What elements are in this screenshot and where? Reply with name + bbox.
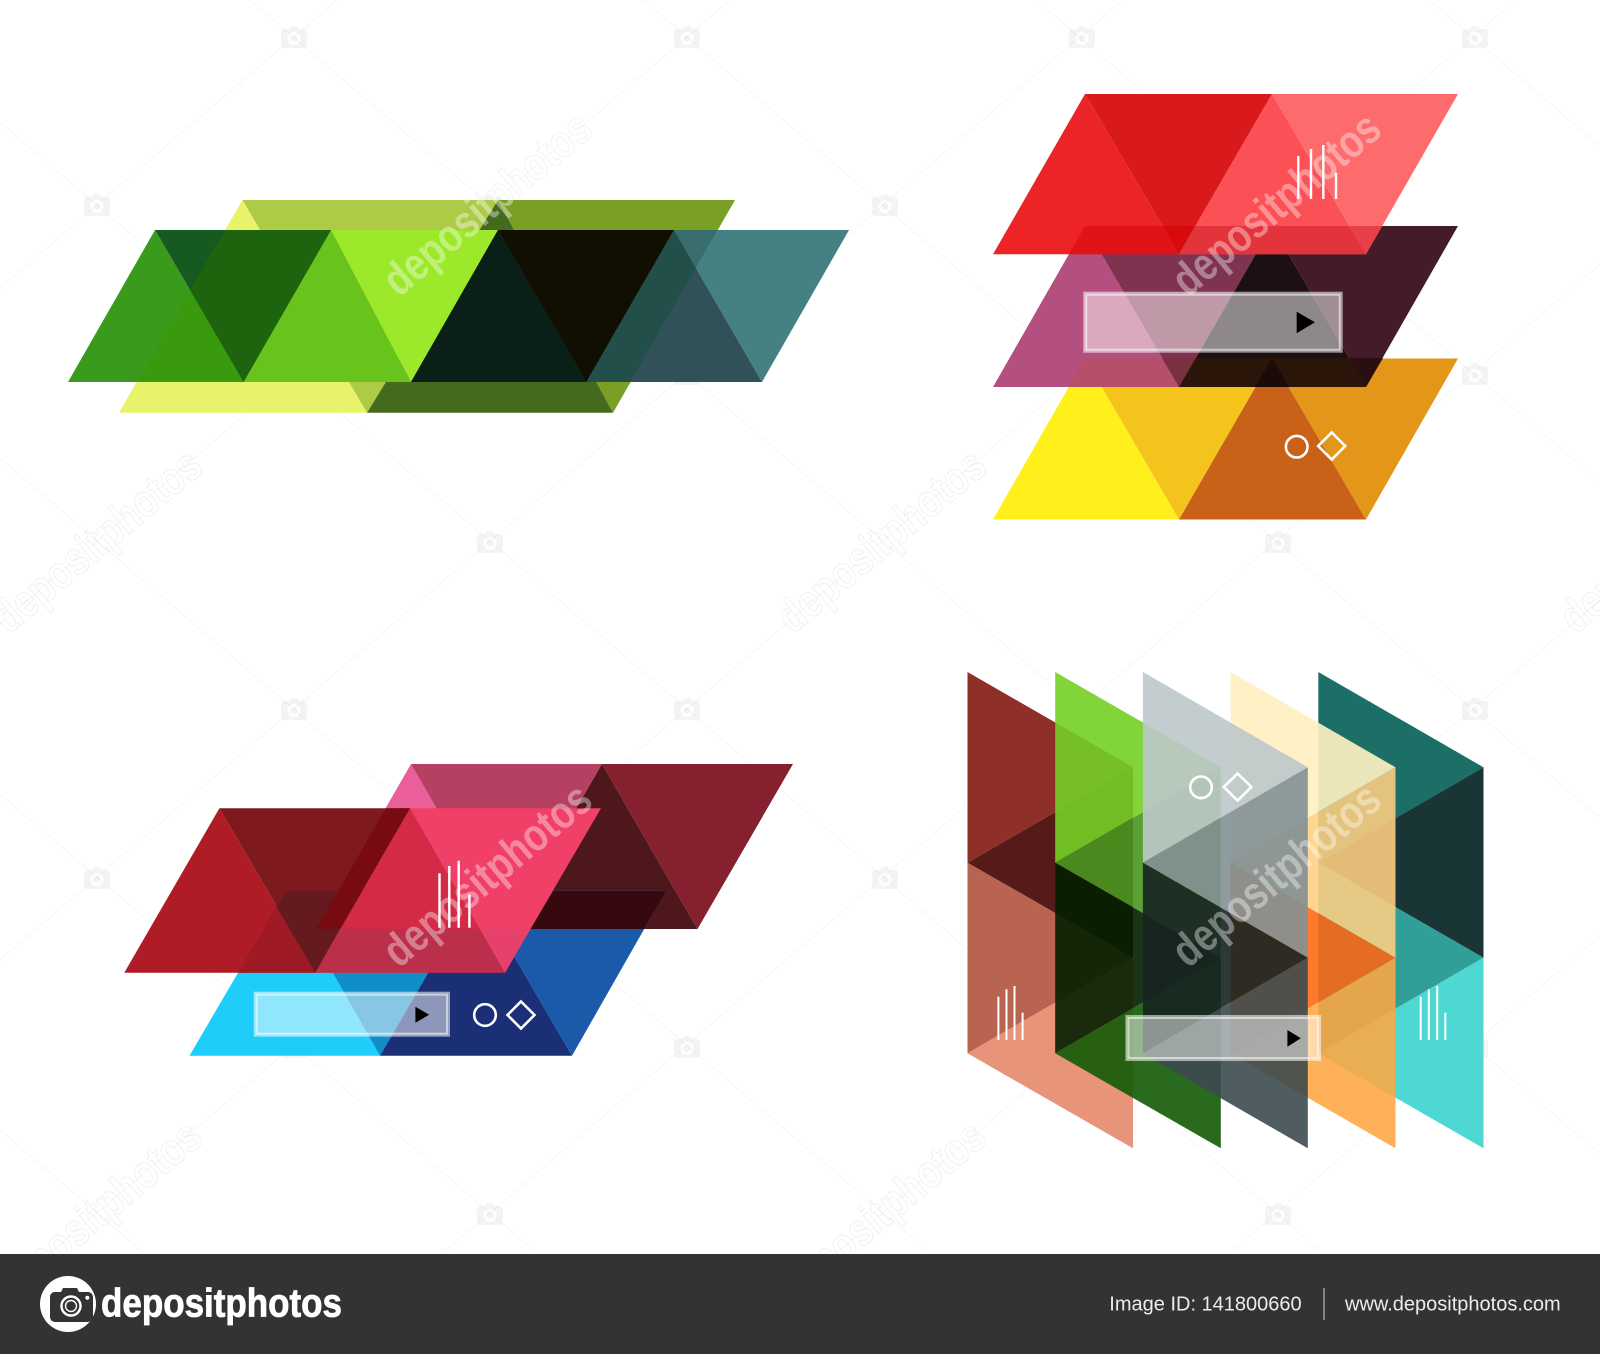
faint watermark camera icons — [84, 26, 1488, 1225]
watermark text over artwork: depositphotos — [1161, 772, 1391, 977]
logo wordmark: depositphotos — [101, 1282, 342, 1326]
strip: green — [1055, 672, 1221, 1148]
blue band — [190, 891, 666, 1056]
amber band — [993, 358, 1458, 520]
watermark text over artwork: depositphotos — [372, 772, 602, 977]
watermark text over artwork: depositphotos — [1161, 101, 1391, 306]
plum band — [993, 226, 1458, 387]
red band — [993, 94, 1458, 254]
icon: circle and diamond — [1190, 774, 1251, 800]
icon: circle and diamond — [1286, 432, 1345, 460]
back lime band — [119, 200, 735, 413]
watermark text over artwork — [372, 101, 1391, 977]
button with play arrow — [1085, 294, 1341, 351]
faint watermark text on white: depositphotos — [766, 438, 996, 643]
button with play arrow — [1127, 1017, 1319, 1059]
faint watermark text on white: depositphotos — [372, 101, 602, 306]
icon: bars left — [998, 986, 1023, 1040]
panel: green horizontal banner — [68, 200, 849, 413]
strip: cream and orange — [1231, 672, 1396, 1148]
icon: circle and diamond — [474, 1002, 534, 1028]
strip: teal — [1318, 672, 1484, 1148]
divider — [1323, 1288, 1325, 1320]
front crimson band — [124, 808, 601, 973]
panel: vertical colored strips — [968, 672, 1484, 1148]
strip: brown — [968, 672, 1133, 1148]
button with play arrow — [256, 994, 448, 1035]
faint watermark text on white: depositphotos — [1161, 101, 1391, 306]
front green to teal band — [68, 230, 849, 382]
icon: bars — [440, 861, 469, 928]
strip: gray — [1143, 672, 1308, 1148]
logo camera icon — [40, 1276, 96, 1332]
image id: Image ID: 141800660 — [1109, 1294, 1302, 1316]
maroon back band — [316, 764, 793, 929]
website url: www.depositphotos.com — [1344, 1294, 1561, 1316]
icon: bars right — [1421, 986, 1445, 1040]
footer bar — [0, 1254, 1600, 1354]
panel: red plum amber stacked banners — [993, 94, 1458, 520]
faint watermark text on white: depositphotos — [766, 1109, 996, 1314]
panel: crimson and blue banners — [124, 764, 793, 1056]
icon: bars — [1298, 145, 1336, 199]
watermark text over artwork: depositphotos — [372, 101, 602, 306]
